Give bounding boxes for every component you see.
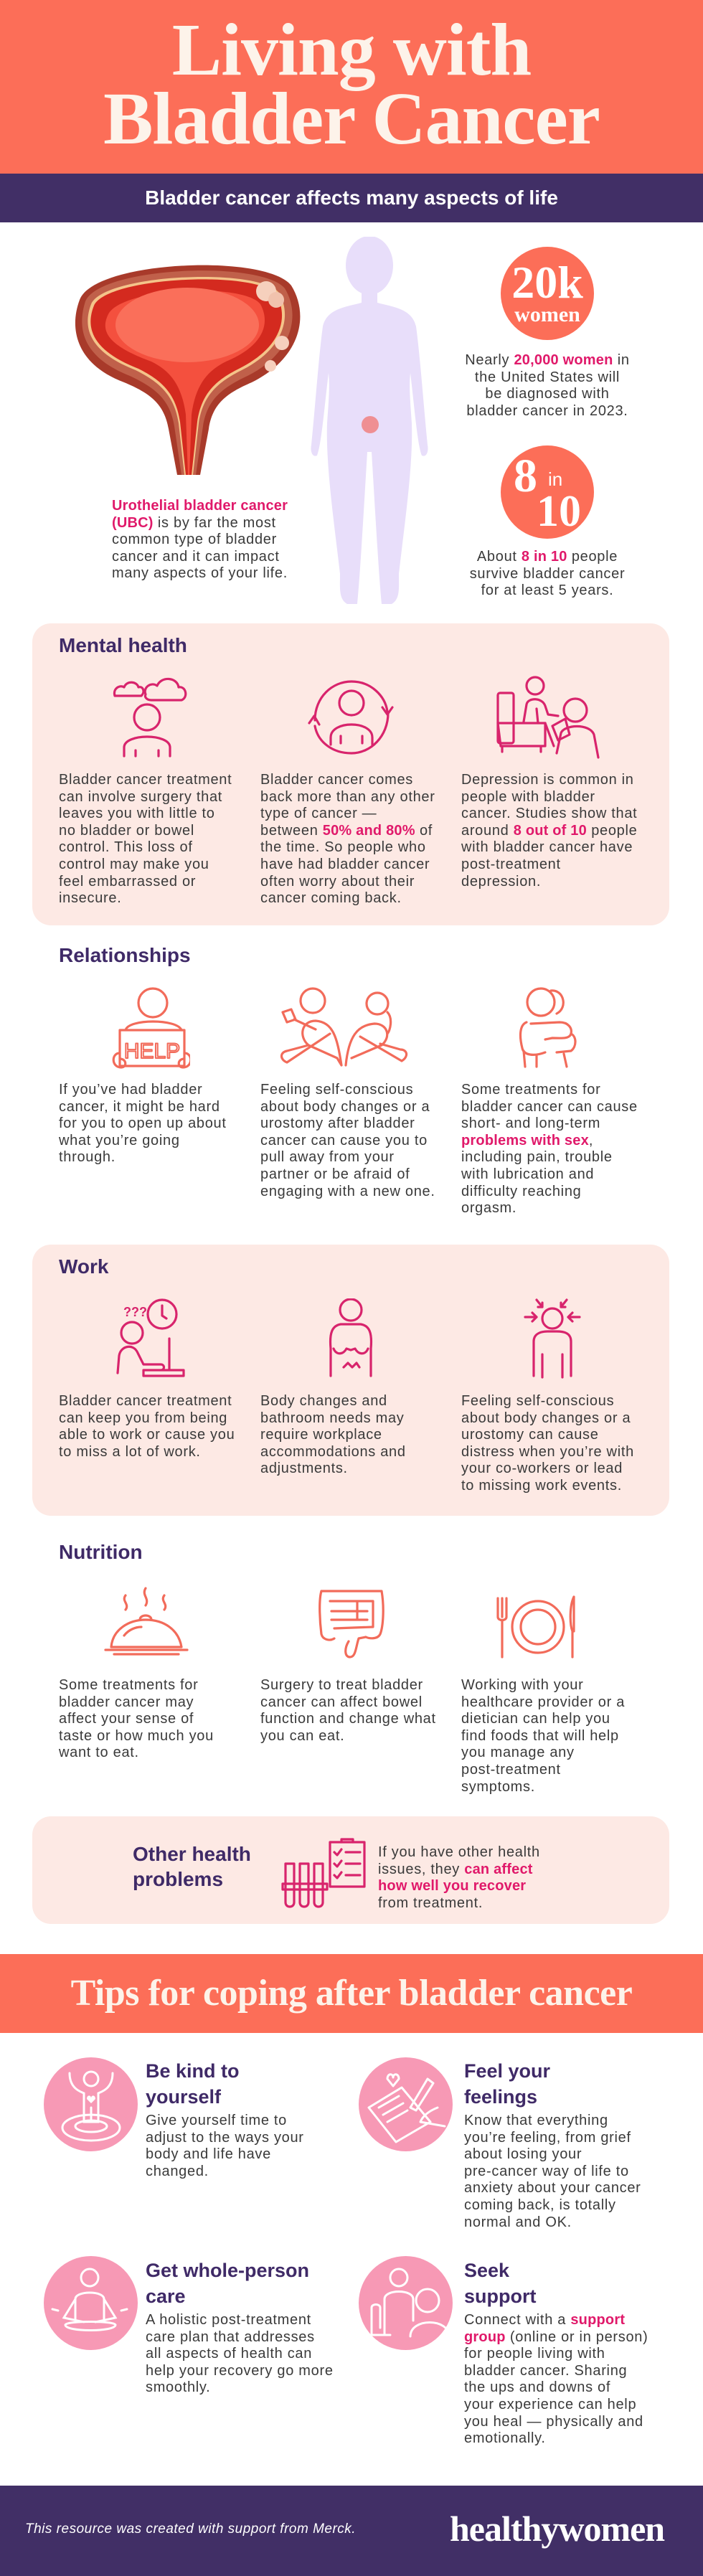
illustration: bladder [75, 265, 300, 475]
text: 20,000 women: Nearly 20,000 women in [465, 352, 630, 368]
text: mental 1: feel embarrassed or [59, 874, 196, 890]
body: Connect with a support [464, 2312, 625, 2328]
text: relationships 2: about body changes or a [260, 1099, 430, 1115]
text: mental 2 [260, 772, 435, 906]
text: nutrition 3: find foods that will help [461, 1728, 619, 1744]
body: A holistic post-treatment [146, 2312, 311, 2328]
text: relationships 2: pull away from your [260, 1149, 395, 1165]
text: other health: from treatment. [378, 1895, 483, 1911]
stat circle: 20k women [501, 247, 594, 340]
icon: intestines [319, 1590, 384, 1659]
body: Give yourself time to [146, 2113, 287, 2128]
heading: work: Work [59, 1255, 109, 1278]
text: nutrition 2: cancer can affect bowel [260, 1694, 423, 1710]
body: Know that everything [464, 2113, 608, 2128]
text: relationships 1: If you’ve had bladder [59, 1082, 202, 1098]
text: work 2: adjustments. [260, 1461, 348, 1476]
text: work 3: to missing work events. [461, 1478, 622, 1494]
body: coming back, is totally [464, 2197, 616, 2213]
text: mental 2: Bladder cancer comes [260, 772, 413, 788]
heading: support [464, 2285, 537, 2307]
text: nutrition 3: dietician can help you [461, 1711, 610, 1727]
text: relationships 2 [260, 1082, 435, 1199]
text: mental 2: between 50% and 80% of [260, 823, 433, 839]
text: nutrition 2: you can eat. [260, 1728, 344, 1744]
text: mental 2: back more than any other [260, 789, 435, 805]
icon: two people back to back [280, 987, 407, 1067]
panel: other health problems [32, 1816, 669, 1924]
text: work 1 [59, 1393, 235, 1460]
tip: be kind [44, 2057, 304, 2179]
body: about losing your [464, 2146, 582, 2162]
icon: recurring cycle [308, 680, 394, 755]
text: 8 in 10: for at least 5 years. [481, 582, 613, 598]
text: work 2: bathroom needs may [260, 1410, 404, 1426]
text: work 3: about body changes or a [461, 1410, 631, 1426]
text: work 1: can keep you from being [59, 1410, 227, 1426]
tip: feel your feelings [359, 2057, 641, 2230]
text: relationships 2: Feeling self-conscious [260, 1082, 413, 1098]
body: smoothly. [146, 2379, 210, 2395]
heading: nutrition: Nutrition [59, 1541, 143, 1563]
text: work 2 [260, 1393, 406, 1476]
text: nutrition 1: want to eat. [59, 1745, 139, 1760]
text: nutrition 3: symptoms. [461, 1779, 535, 1795]
logo: healthywomen: healthywomen [450, 2509, 664, 2549]
body: normal and OK. [464, 2214, 572, 2230]
body: bladder cancer. Sharing [464, 2363, 627, 2379]
heading: Seek [464, 2260, 509, 2281]
stat circle: 20k women: women [514, 303, 580, 326]
text: mental 3: with bladder cancer have [461, 839, 633, 855]
text: mental 3 [461, 772, 637, 890]
panel: mental health [32, 623, 669, 925]
text: mental 2: often worry about their [260, 874, 415, 890]
heading [146, 2060, 240, 2108]
stat circle: 8 in 10: 8 [514, 450, 537, 502]
text: other health [378, 1844, 540, 1911]
text: UBC: Urothelial bladder cancer [112, 498, 288, 514]
text: mental 1: insecure. [59, 890, 121, 906]
text: nutrition 3: Working with your [461, 1677, 583, 1693]
text: nutrition 3: you manage any [461, 1745, 575, 1760]
text: mental 3: Depression is common in [461, 772, 634, 788]
text: mental 2: the time. So people who [260, 839, 426, 855]
body: for people living with [464, 2346, 605, 2362]
subtitle: Bladder cancer affects many aspects of life [145, 187, 558, 209]
footer credit: This resource was created with support from Merck. [25, 2521, 356, 2537]
header banner [0, 0, 703, 174]
text: 20,000 women: bladder cancer in 2023. [466, 403, 628, 419]
text: relationships 3: including pain, trouble [461, 1149, 613, 1165]
icon: serving dish [104, 1587, 189, 1656]
text: other health: If you have other health [378, 1844, 540, 1860]
stat circle: 20k women: 20k [511, 257, 583, 308]
icon: test tubes and clipboard [281, 1838, 366, 1908]
heading: Feel your [464, 2060, 550, 2082]
icon: worker with clock: ??? [123, 1305, 147, 1319]
text: mental 2: have had bladder cancer [260, 857, 430, 872]
text: relationships 3: Some treatments for [461, 1082, 600, 1098]
text: relationships 1: for you to open up about [59, 1115, 227, 1131]
stat circle: 8 in 10: 10 [537, 487, 581, 536]
body: body and life have [146, 2146, 271, 2162]
text: nutrition 1: Some treatments for [59, 1677, 198, 1693]
text: work 1: to miss a lot of work. [59, 1444, 201, 1460]
text: mental 1 [59, 772, 232, 906]
text: relationships 1: what you’re going [59, 1133, 180, 1148]
text: relationships 2: partner or be afraid of [260, 1166, 410, 1182]
icon: person with clouds [113, 677, 187, 758]
text: work 2: Body changes and [260, 1393, 387, 1409]
heading [464, 2257, 537, 2309]
text: work 1: able to work or cause you [59, 1427, 235, 1443]
text: relationships 2: urostomy after bladder [260, 1115, 415, 1131]
text: relationships 3: difficulty reaching [461, 1184, 581, 1199]
heading: care [146, 2285, 186, 2307]
text: nutrition 1 [59, 1677, 214, 1760]
panel: work [32, 1245, 669, 1516]
text: UBC: (UBC) is by far the most [112, 515, 276, 531]
text: nutrition 1: affect your sense of [59, 1711, 194, 1727]
icon: plate and cutlery [496, 1595, 575, 1659]
text: mental 1: no bladder or bowel [59, 823, 194, 839]
text: relationships 3: orgasm. [461, 1200, 516, 1216]
body: adjust to the ways your [146, 2130, 304, 2146]
text: work 3 [461, 1393, 634, 1494]
text: mental 1: can involve surgery that [59, 789, 222, 805]
heading [146, 2257, 309, 2309]
icon: help sign [112, 987, 190, 1069]
heading: Be kind to [146, 2060, 240, 2082]
body [464, 2312, 648, 2448]
text: relationships 3: short- and long-term [461, 1115, 600, 1131]
text: nutrition 1: taste or how much you [59, 1728, 214, 1744]
text: mental 3: people with bladder [461, 789, 595, 805]
heading: Get whole-person [146, 2260, 309, 2281]
text: mental 1: control. This loss of [59, 839, 193, 855]
text: mental 1: Bladder cancer treatment [59, 772, 232, 788]
text: work 3: distress when you’re with [461, 1444, 634, 1460]
icon: person with stress arrows [524, 1298, 581, 1379]
text: 8 in 10 [470, 549, 625, 598]
body: emotionally. [464, 2430, 546, 2446]
body: your experience can help [464, 2397, 636, 2412]
text: relationships 1 [59, 1082, 227, 1165]
title: Bladder Cancer [103, 77, 600, 160]
icon: journal [359, 2057, 453, 2151]
text: mental 3: post-treatment [461, 857, 561, 872]
text: 20,000 women: be diagnosed with [485, 386, 610, 402]
text: other health: issues, they can affect [378, 1862, 533, 1877]
text: mental 2: type of cancer — [260, 806, 377, 821]
text: UBC: many aspects of your life. [112, 565, 288, 581]
icon: therapy session [496, 676, 600, 759]
body [146, 2312, 334, 2397]
illustration: woman silhouette [311, 237, 428, 604]
text: work 1: Bladder cancer treatment [59, 1393, 232, 1409]
text: mental 2: cancer coming back. [260, 890, 402, 906]
title [103, 9, 600, 160]
tip: whole-person care [44, 2256, 345, 2400]
text: 8 in 10: survive bladder cancer [470, 566, 625, 582]
body: pre-cancer way of life to [464, 2164, 629, 2179]
icon: hug [519, 987, 577, 1068]
text: UBC: common type of bladder [112, 532, 277, 547]
text: relationships 1: cancer, it might be hard [59, 1099, 220, 1115]
body: care plan that addresses [146, 2329, 315, 2345]
body: you heal — physically and [464, 2414, 643, 2430]
text: mental 3: cancer. Studies show that [461, 806, 637, 821]
text: nutrition 1: bladder cancer may [59, 1694, 194, 1710]
body: all aspects of health can [146, 2346, 312, 2362]
text: relationships 3: bladder cancer can cause [461, 1099, 638, 1115]
stat circle: 8 in 10 [501, 445, 594, 539]
heading: mental health: Mental health [59, 634, 187, 656]
text: nutrition 3: post-treatment [461, 1762, 561, 1778]
heading [464, 2060, 550, 2108]
text: work 3: urostomy can cause [461, 1427, 599, 1443]
banner: tips [0, 1954, 703, 2033]
icon: meditation [44, 2256, 138, 2350]
text: relationships 1: through. [59, 1149, 115, 1165]
icon: person holding abdomen [329, 1298, 373, 1377]
icon: worker with clock [116, 1298, 185, 1377]
heading: relationships: Relationships [59, 944, 191, 966]
heading: other health problems: problems [133, 1868, 223, 1890]
text: nutrition 3: healthcare provider or a [461, 1694, 625, 1710]
text: work 2: require workplace [260, 1427, 382, 1443]
icon: help sign: HELP [124, 1039, 180, 1063]
text: work 3: Feeling self-conscious [461, 1393, 614, 1409]
body: anxiety about your cancer [464, 2180, 641, 2196]
body: you’re feeling, from grief [464, 2130, 631, 2146]
heading: other health problems [133, 1843, 251, 1890]
stat circle: 8 in 10: in [548, 468, 562, 490]
text: 20,000 women [465, 352, 630, 419]
text: nutrition 2 [260, 1677, 436, 1744]
text: 8 in 10: About 8 in 10 people [477, 549, 618, 565]
heading: feelings [464, 2086, 537, 2108]
text: other health: how well you recover [378, 1878, 526, 1894]
heading: yourself [146, 2086, 221, 2108]
body: changed. [146, 2164, 209, 2179]
icon: support session [359, 2256, 453, 2350]
text: relationships 2: cancer can cause you to [260, 1133, 428, 1148]
tip: seek support [359, 2256, 674, 2486]
footer [0, 2486, 703, 2576]
text: work 3: your co-workers or lead [461, 1461, 623, 1476]
text: UBC [112, 498, 288, 581]
text: relationships 3: problems with sex, [461, 1133, 593, 1148]
text: mental 1: control may make you [59, 857, 209, 872]
text: work 2: accommodations and [260, 1444, 406, 1460]
icon: arms raised [44, 2057, 138, 2151]
text: 20,000 women: the United States will [475, 369, 620, 385]
text: nutrition 2: function and change what [260, 1711, 436, 1727]
title: Living with [172, 9, 531, 91]
body [146, 2113, 304, 2179]
text: nutrition 2: Surgery to treat bladder [260, 1677, 423, 1693]
subtitle band [0, 174, 703, 222]
text: mental 1: leaves you with little to [59, 806, 215, 821]
tips title: Tips for coping after bladder cancer [71, 1973, 632, 2014]
body: group (online or in person) [464, 2329, 648, 2345]
text: UBC: cancer and it can impact [112, 549, 280, 565]
text: relationships 3: with lubrication and [461, 1166, 594, 1182]
body: the ups and downs of [464, 2379, 610, 2395]
heading: other health problems: Other health [133, 1843, 251, 1865]
body [464, 2113, 641, 2231]
text: relationships 2: engaging with a new one. [260, 1184, 435, 1199]
text: mental 3: depression. [461, 874, 541, 890]
body: help your recovery go more [146, 2363, 334, 2379]
text: relationships 3 [461, 1082, 638, 1216]
text: mental 3: around 8 out of 10 people [461, 823, 637, 839]
text: nutrition 3 [461, 1677, 625, 1795]
